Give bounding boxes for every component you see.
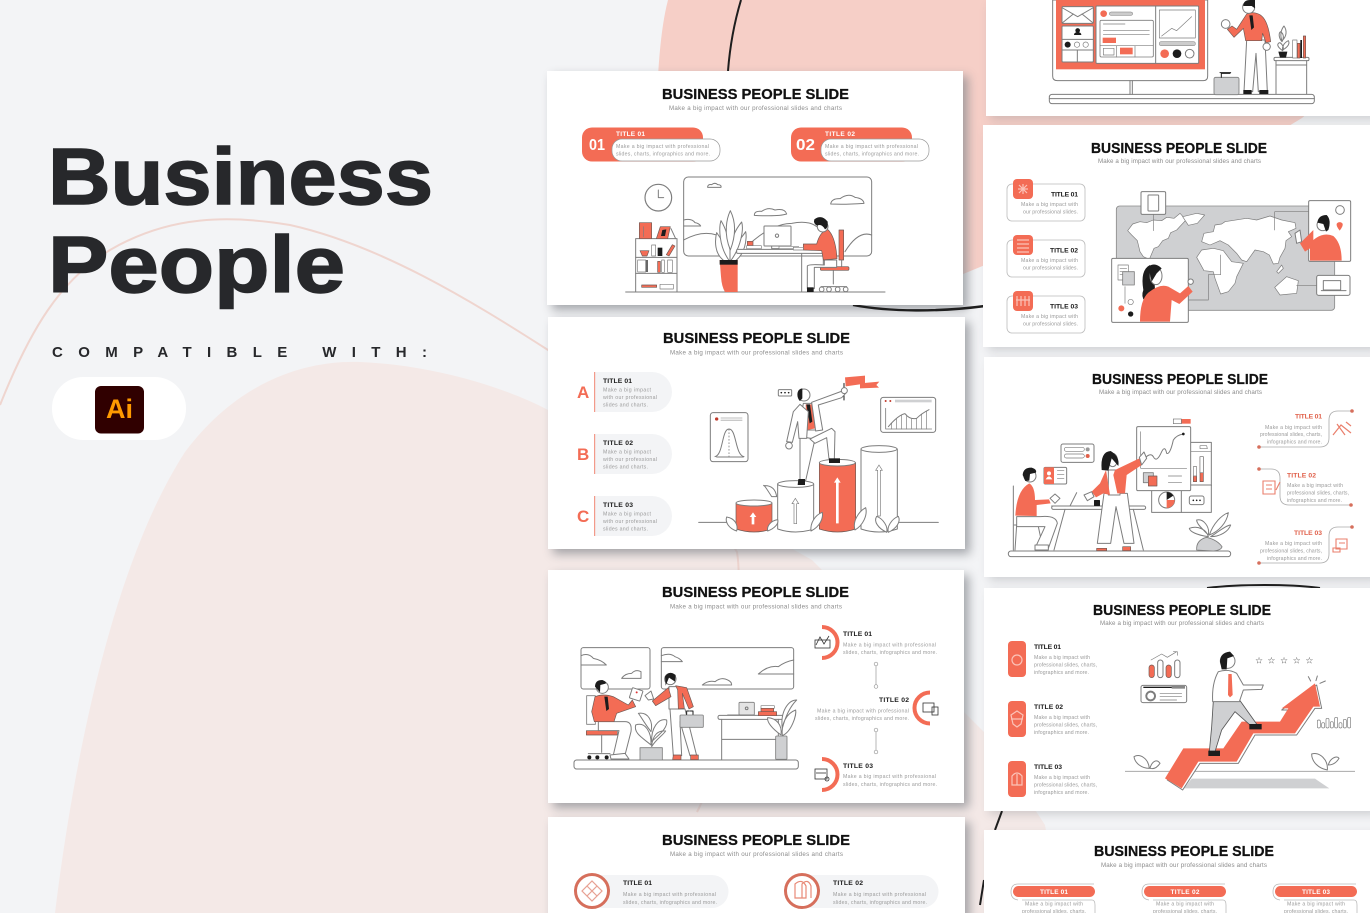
list item 01: slides, charts, infographics and more. xyxy=(623,900,717,906)
list item B: Make a big impact xyxy=(603,450,652,456)
list item B: TITLE 02 xyxy=(603,440,633,447)
compatible with label: COMPATIBLE WITH: xyxy=(52,344,427,361)
list item C: Make a big impact xyxy=(603,512,652,518)
panel: slide podium growth xyxy=(548,317,965,549)
column 03: TITLE 03 xyxy=(1302,889,1330,896)
list item 03 xyxy=(815,759,937,790)
list card 01 xyxy=(1007,179,1085,221)
list item 03: Make a big impact with xyxy=(1265,541,1322,547)
list card 02: Make a big impact with xyxy=(1021,258,1078,264)
list item 03 xyxy=(1008,761,1097,797)
connector xyxy=(874,728,878,754)
list item 02: professional slides, charts, xyxy=(1287,490,1349,496)
list item 02: professional slides, charts, xyxy=(1034,722,1097,728)
list item 01: TITLE 01 xyxy=(1295,414,1322,420)
list item C: TITLE 03 xyxy=(603,502,633,509)
heading: BUSINESS PEOPLE SLIDE xyxy=(662,585,849,601)
illustration: man climbing arrow: ☆ xyxy=(1280,656,1288,666)
list item 02: TITLE 02 xyxy=(1034,704,1063,711)
list item 02: Make a big impact with xyxy=(1287,483,1343,489)
list item 02: Make a big impact with professional xyxy=(833,892,926,898)
illustration: climbing bar chart xyxy=(699,376,938,532)
illustration: man climbing arrow xyxy=(1125,652,1355,790)
callout 02: 02 xyxy=(796,137,815,154)
list item 02: Make a big impact with professional xyxy=(817,708,909,714)
column 02: TITLE 02 xyxy=(1170,889,1200,896)
list card 01: TITLE 01 xyxy=(1051,192,1078,198)
list item B xyxy=(577,434,672,474)
subheading: Make a big impact with our professional slides and charts xyxy=(1099,389,1262,396)
list item A: with our professional xyxy=(603,395,657,401)
panel: slide two circles xyxy=(548,817,965,913)
list card 03: our professional slides. xyxy=(1023,322,1078,328)
heading: BUSINESS PEOPLE SLIDE xyxy=(662,833,850,849)
list item 01: infographics and more. xyxy=(1034,670,1089,676)
column 01: Make a big impact with xyxy=(1025,902,1083,908)
column 03 xyxy=(1273,884,1357,913)
list item 03: professional slides, charts, xyxy=(1260,548,1322,554)
list card 02 xyxy=(1007,235,1085,277)
list item A: Make a big impact xyxy=(603,388,652,394)
list card 03 xyxy=(1007,291,1085,333)
illustration: man climbing arrow: ☆ xyxy=(1305,656,1313,666)
black decorative curves xyxy=(728,0,1320,905)
list card 02: our professional slides. xyxy=(1023,266,1078,272)
illustration: two colleagues xyxy=(574,648,798,769)
slide shadows xyxy=(552,5,1370,913)
callout 01: TITLE 01 xyxy=(616,131,645,138)
callout 01: slides, charts, infographics and more. xyxy=(616,152,710,158)
list item 02 xyxy=(1008,701,1097,737)
list item 02: infographics and more. xyxy=(1287,498,1342,504)
panel: slide three columns xyxy=(984,830,1370,913)
connector xyxy=(874,662,878,688)
illustration: person at desk xyxy=(626,177,885,292)
callout 02: Make a big impact with professional xyxy=(825,144,918,150)
panel: slide arrow climb xyxy=(984,588,1370,811)
list item B: with our professional xyxy=(603,457,657,463)
list item 01 xyxy=(1008,641,1097,677)
list item A: slides and charts. xyxy=(603,402,648,408)
list item 01: Make a big impact with professional xyxy=(843,642,936,648)
list item 02: Make a big impact with xyxy=(1034,715,1090,721)
list card 03: TITLE 03 xyxy=(1050,304,1078,310)
list item B: B xyxy=(577,445,589,464)
list item 02: TITLE 02 xyxy=(1287,472,1316,480)
list item 03: Make a big impact with professional xyxy=(843,774,936,780)
list item 02: TITLE 02 xyxy=(833,880,863,887)
heading: BUSINESS PEOPLE SLIDE xyxy=(1091,141,1267,157)
panel: slide meeting xyxy=(548,570,964,803)
list item 01: slides, charts, infographics and more. xyxy=(843,650,937,656)
list item 03: infographics and more. xyxy=(1267,556,1322,562)
icon: illustrator badge xyxy=(52,377,186,440)
title xyxy=(48,132,433,309)
list item 01: TITLE 01 xyxy=(623,880,652,887)
list item 01: infographics and more. xyxy=(1267,440,1322,446)
list item 01: TITLE 01 xyxy=(843,631,872,638)
callout 02 xyxy=(791,128,929,162)
list item 01 xyxy=(815,627,937,658)
list item 01 xyxy=(1257,409,1354,449)
column 03: Make a big impact with xyxy=(1287,902,1345,908)
heading: BUSINESS PEOPLE SLIDE xyxy=(1093,603,1271,619)
list item 02 xyxy=(815,692,938,724)
list item 02: infographics and more. xyxy=(1034,730,1089,736)
list card 01: our professional slides. xyxy=(1023,210,1078,216)
callout 01 xyxy=(582,128,720,162)
subheading: Make a big impact with our professional slides and charts xyxy=(1098,158,1261,165)
list item 03: professional slides, charts, xyxy=(1034,782,1097,788)
list item 03: TITLE 03 xyxy=(843,763,873,770)
list item 03: TITLE 03 xyxy=(1294,530,1322,537)
column 02: Make a big impact with xyxy=(1156,902,1214,908)
title: People xyxy=(48,220,345,309)
list item 02: TITLE 02 xyxy=(879,697,909,704)
list item 02 xyxy=(786,874,938,908)
list item 01 xyxy=(576,874,728,908)
subheading: Make a big impact with our professional slides and charts xyxy=(1100,620,1264,627)
list item 01: Make a big impact with professional xyxy=(623,892,716,898)
illustration: man climbing arrow: ☆ xyxy=(1267,656,1275,666)
list item A: TITLE 01 xyxy=(603,378,632,385)
callout 02: TITLE 02 xyxy=(825,131,855,138)
callout 01: 01 xyxy=(589,137,605,154)
list item 03: infographics and more. xyxy=(1034,790,1089,796)
list item C: slides and charts. xyxy=(603,526,648,532)
illustration: world map with presenters xyxy=(1112,192,1351,322)
heading: BUSINESS PEOPLE SLIDE xyxy=(662,87,849,103)
list item A xyxy=(577,372,672,412)
list item 02: slides, charts, infographics and more. xyxy=(815,716,909,722)
list card 02: TITLE 02 xyxy=(1050,248,1078,254)
list item B: slides and charts. xyxy=(603,464,648,470)
illustration: monitor and presenter xyxy=(1049,0,1314,104)
list item 01: TITLE 01 xyxy=(1034,644,1061,651)
subheading: Make a big impact with our professional slides and charts xyxy=(1101,862,1267,869)
subheading: Make a big impact with our professional slides and charts xyxy=(670,350,843,356)
list item A: A xyxy=(577,383,589,402)
illustration: team with chart board xyxy=(1008,419,1231,557)
list item 03: Make a big impact with xyxy=(1034,775,1090,781)
list item 01: professional slides, charts, xyxy=(1260,432,1322,438)
subheading: Make a big impact with our professional slides and charts xyxy=(670,851,843,858)
list item 01: Make a big impact with xyxy=(1034,655,1090,661)
panel: slide team chart xyxy=(984,357,1370,577)
list card 01: Make a big impact with xyxy=(1021,202,1078,208)
list item C xyxy=(577,496,672,536)
column 01: TITLE 01 xyxy=(1040,889,1068,896)
panel: slide world map xyxy=(983,125,1370,347)
list item 03: slides, charts, infographics and more. xyxy=(843,782,937,788)
illustration: man climbing arrow: ☆ xyxy=(1255,656,1263,666)
column 01 xyxy=(1011,884,1095,913)
title: Business xyxy=(48,132,433,221)
list card 03: Make a big impact with xyxy=(1021,314,1078,320)
panel: slide monitor presenter xyxy=(986,0,1370,116)
list item 02: slides, charts, infographics and more. xyxy=(833,900,927,906)
panel: slide office desk xyxy=(547,71,963,305)
list item 03: TITLE 03 xyxy=(1034,764,1062,771)
list item 01: professional slides, charts, xyxy=(1034,662,1097,668)
subheading: Make a big impact with our professional slides and charts xyxy=(669,105,842,112)
list item 01: Make a big impact with xyxy=(1265,425,1322,431)
list item 02 xyxy=(1257,467,1353,507)
subheading: Make a big impact with our professional slides and charts xyxy=(670,604,842,610)
illustration: man climbing arrow: ☆ xyxy=(1293,656,1301,666)
icon: illustrator badge: Ai xyxy=(106,394,133,424)
heading: BUSINESS PEOPLE SLIDE xyxy=(1094,844,1274,860)
callout 01: Make a big impact with professional xyxy=(616,144,709,150)
callout 02: slides, charts, infographics and more. xyxy=(825,152,919,158)
list item C: C xyxy=(577,507,589,526)
heading: BUSINESS PEOPLE SLIDE xyxy=(1092,372,1268,388)
column 02 xyxy=(1142,884,1226,913)
list item C: with our professional xyxy=(603,519,657,525)
heading: BUSINESS PEOPLE SLIDE xyxy=(663,331,850,347)
list item 03 xyxy=(1257,525,1354,565)
